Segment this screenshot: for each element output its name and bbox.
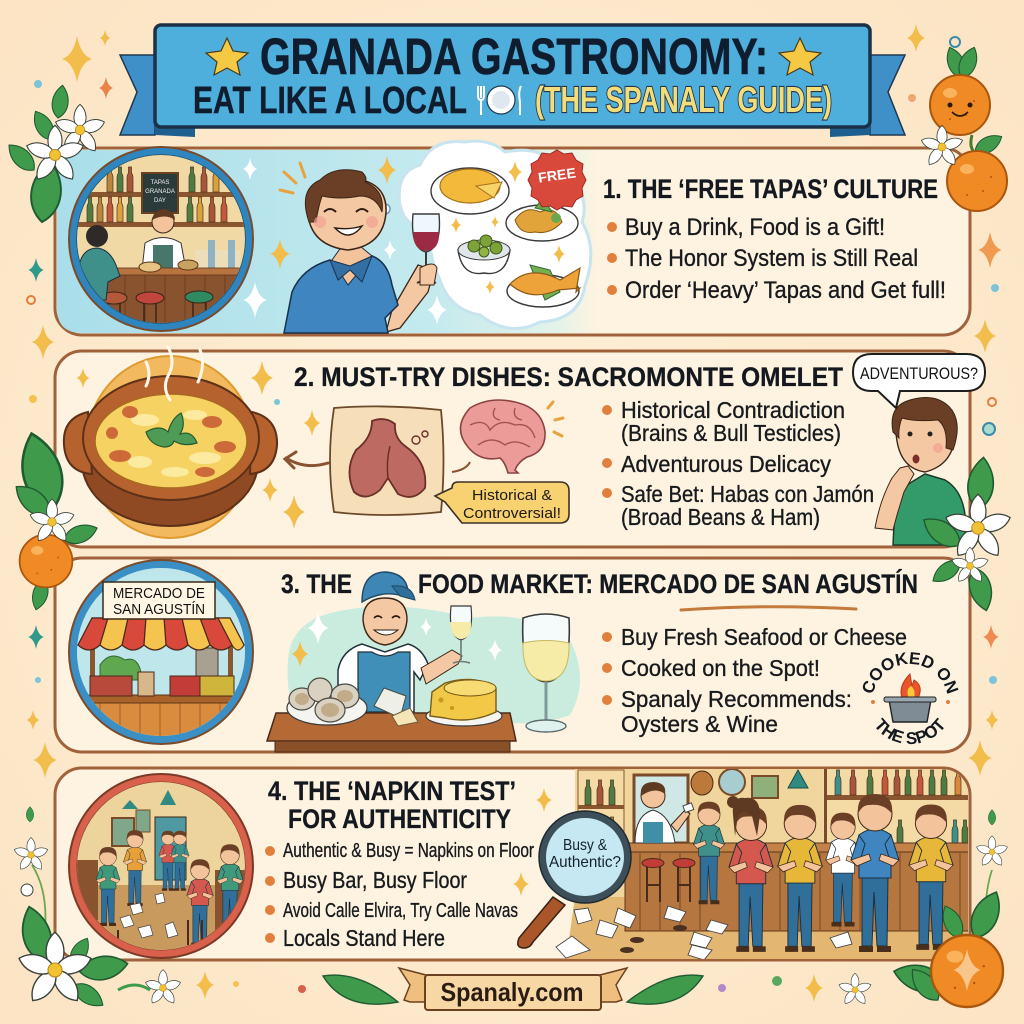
free badge: FREE — [537, 164, 577, 186]
magnifying glass: Busy & — [563, 837, 607, 854]
bullet list 2: (Brains & Bull Testicles) — [621, 420, 841, 446]
footer banner — [323, 968, 703, 1010]
heading 3 — [281, 568, 918, 599]
heading 2: 2. MUST-TRY DISHES: SACROMONTE OMELET — [294, 362, 843, 392]
big wine glass — [523, 614, 569, 732]
napkins on floor — [556, 906, 852, 960]
bullet list 2 — [602, 397, 874, 530]
market sign: SAN AGUSTÍN — [113, 601, 205, 618]
footer banner: Spanaly.com — [440, 977, 584, 1007]
market sign: MERCADO DE — [113, 585, 205, 602]
callout: historical and controversial: Controversial! — [463, 505, 561, 522]
parchment with bull testicles — [330, 406, 444, 515]
bullet list 2: Historical Contradiction — [621, 397, 845, 423]
fish plate — [507, 265, 580, 307]
crowded bar roundel — [69, 774, 253, 960]
bullet list 1 — [607, 214, 946, 304]
speech bubble: adventurous — [853, 354, 985, 408]
ribbon tails — [120, 55, 905, 137]
bullet list 3: Buy Fresh Seafood or Cheese — [621, 624, 907, 650]
awning — [78, 618, 244, 650]
bar counter — [624, 852, 968, 932]
floral corner: top left — [3, 84, 106, 224]
floral stem: right lower — [975, 810, 1009, 925]
olives bowl — [458, 235, 510, 274]
bartender — [635, 782, 694, 843]
title line one: GRANADA GASTRONOMY: — [260, 28, 768, 85]
bullet list 2: Safe Bet: Habas con Jamón — [621, 481, 874, 507]
magnifying glass — [518, 811, 631, 948]
bullet list 4: Authentic & Busy = Napkins on Floor — [283, 840, 534, 862]
floral stem: left lower — [13, 807, 49, 930]
croquettes plate — [506, 198, 578, 241]
heading underline — [681, 607, 856, 610]
star right — [779, 38, 821, 75]
stools — [647, 865, 690, 902]
stamp: cooked on the spot: COOKED ON — [862, 652, 958, 694]
market stall roundel — [69, 560, 253, 750]
heading 3: 3. THE — [281, 569, 352, 599]
panel 4: napkin test — [55, 765, 970, 965]
arrow to omelet — [285, 452, 328, 468]
heading 4: 4. THE ‘NAPKIN TEST’ — [268, 776, 516, 806]
callout: historical and controversial: Historical & — [472, 487, 552, 504]
patrons — [693, 802, 725, 904]
bullet list 4: Locals Stand Here — [283, 925, 445, 951]
star left — [206, 38, 248, 75]
speech bubble: adventurous: ADVENTUROUS? — [860, 364, 978, 383]
bar scene roundel: GRANADA — [145, 189, 175, 195]
magnifying glass: Authentic? — [549, 854, 621, 871]
vendor with cap — [338, 572, 472, 712]
market sign — [103, 582, 215, 619]
brain — [452, 400, 563, 473]
stamp: cooked on the spot: THE SPOT — [876, 718, 944, 744]
bullet list 3 — [602, 624, 907, 737]
bullet list 2: (Broad Beans & Ham) — [621, 504, 820, 530]
bullet list 4 — [265, 840, 534, 951]
floral corner: bottom right — [838, 887, 1007, 1007]
title line two: EAT LIKE A LOCAL — [193, 80, 467, 122]
man with wine glass — [243, 156, 447, 333]
panel 1: free tapas culture — [55, 141, 970, 335]
wine glass — [413, 214, 439, 283]
teal backdrop — [57, 150, 596, 333]
floral cluster: left middle — [10, 429, 100, 612]
teal blob — [288, 606, 580, 723]
subtitle in yellow: (THE SPANALY GUIDE) — [535, 79, 832, 120]
bullet list 4: Busy Bar, Busy Floor — [283, 867, 467, 893]
bullet list 4: Avoid Calle Elvira, Try Calle Navas — [283, 900, 518, 922]
bar scene roundel: DAY — [154, 198, 166, 204]
bullet list 3: Spanaly Recommends: — [621, 686, 852, 712]
leaf right — [627, 975, 703, 1004]
omelet in clay pot — [64, 347, 277, 538]
bar scene roundel: TAPAS — [151, 180, 169, 186]
bullet list 3: Oysters & Wine — [621, 711, 778, 737]
bullet list 1: Order ‘Heavy’ Tapas and Get full! — [625, 277, 946, 304]
heading 4 — [268, 776, 516, 834]
plate and cutlery icon — [478, 86, 521, 115]
heading 1: 1. THE ‘FREE TAPAS’ CULTURE — [603, 174, 938, 204]
bullet list 2: Adventurous Delicacy — [621, 451, 831, 477]
tortilla plate — [431, 168, 509, 214]
panel 2: must-try dishes — [55, 347, 985, 547]
free badge — [528, 150, 586, 210]
floral cluster: right middle — [918, 456, 1013, 613]
panel 3: food market — [54, 556, 972, 754]
bullet list 3: Cooked on the Spot! — [621, 655, 820, 681]
bullet list 1: The Honor System is Still Real — [625, 245, 918, 272]
table with oysters and cheese — [267, 678, 516, 752]
bar scene roundel — [69, 147, 253, 332]
stamp: cooked on the spot — [862, 652, 958, 744]
heading 3: FOOD MARKET: MERCADO DE SAN AGUSTÍN — [418, 568, 918, 599]
oranges: top right — [920, 44, 1007, 211]
title banner — [120, 25, 905, 137]
floral corner: bottom left — [16, 903, 182, 1012]
callout: historical and controversial — [435, 482, 569, 523]
curious person — [875, 398, 965, 545]
leaf left — [323, 975, 398, 1004]
busy bar scene — [556, 765, 970, 965]
bullet list 1: Buy a Drink, Food is a Gift! — [625, 214, 885, 241]
heading 4: FOR AUTHENTICITY — [288, 804, 511, 834]
thought cloud with tapas — [380, 141, 591, 329]
